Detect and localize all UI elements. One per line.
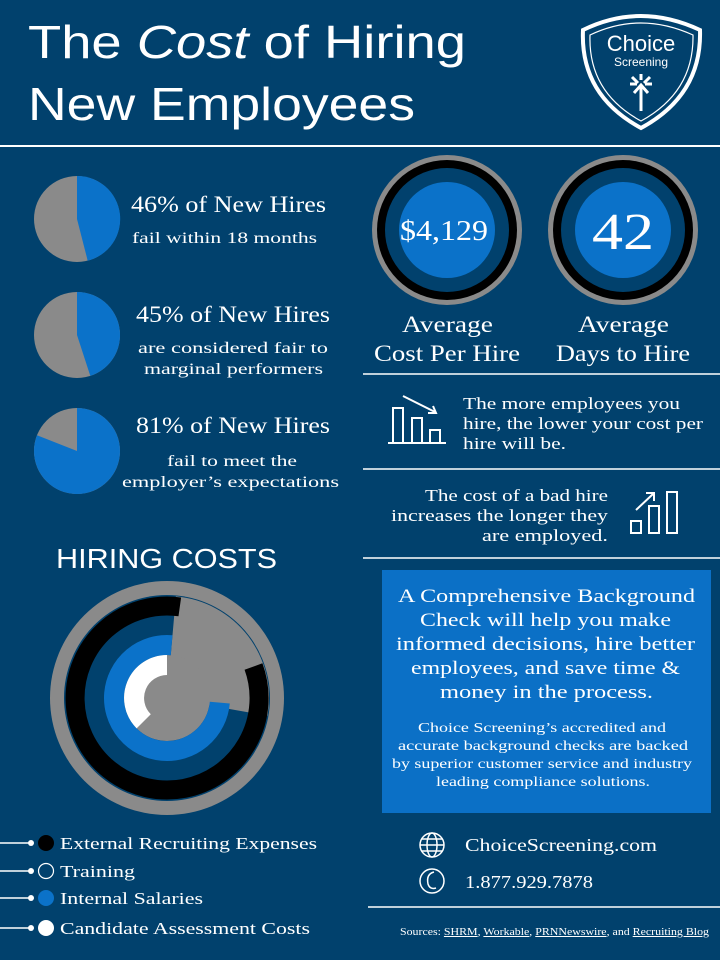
icon: phone (420, 869, 444, 893)
sources: Sources: SHRM , Workable , PRNNewswire , and Recruiting Blog (400, 927, 709, 938)
stat text: 46%: 46% of New Hires (131, 192, 326, 217)
logo: Choice Screening shield: Choice (607, 31, 675, 56)
radial chart: hiring costs (50, 581, 284, 815)
ring stat: days to hire (548, 155, 698, 366)
ring stat: cost per hire: Cost Per Hire (374, 341, 520, 366)
ring stat: days to hire: Average (578, 312, 669, 337)
website: ChoiceScreening.com (465, 835, 657, 855)
legend: Training (60, 862, 136, 881)
callout box: Check will help you make (420, 610, 671, 631)
pie: 46% (34, 176, 120, 262)
text: more employees (463, 394, 704, 453)
phone number: 1.877.929.7878 (465, 872, 593, 892)
callout box: money in the process. (440, 682, 653, 703)
text: more employees: hire will be. (463, 434, 566, 453)
legend: Candidate Assessment Costs (60, 919, 310, 938)
callout box: accurate background checks are backed (398, 738, 688, 753)
icon: decreasing bars (388, 396, 446, 443)
stat text: 45%: 45% of New Hires (136, 302, 330, 327)
stat text: 45%: marginal performers (144, 361, 323, 378)
stat text: 45%: are considered fair to (138, 340, 328, 357)
callout box: informed decisions, hire better (396, 634, 696, 655)
stat text: 45% (136, 302, 330, 378)
legend (0, 834, 317, 938)
legend: External Recruiting Expenses (60, 834, 317, 853)
stat text: 81%: fail to meet the (167, 453, 297, 470)
text: bad hire: are employed. (482, 526, 608, 545)
icon: increasing bars (631, 492, 677, 533)
callout box: by superior customer service and industry (392, 756, 692, 771)
callout box: leading compliance solutions. (436, 774, 650, 789)
ring stat: cost per hire (372, 155, 522, 366)
stat text: 81% (122, 413, 339, 491)
text: bad hire: The cost of a bad hire (425, 486, 608, 505)
pie: 45% (34, 292, 120, 378)
title (28, 16, 466, 130)
ring stat: days to hire: Days to Hire (556, 341, 690, 366)
pie: 81% (34, 408, 120, 494)
text: bad hire (391, 486, 609, 545)
title: New Employees (28, 78, 415, 130)
ring stat: cost per hire: $4,129 (400, 216, 488, 247)
stat text: 81%: 81% of New Hires (136, 413, 330, 438)
callout box: employees, and save time & (411, 658, 680, 679)
callout box: A Comprehensive Background (398, 586, 696, 607)
logo: Choice Screening shield (583, 16, 700, 128)
title: The Cost of Hiring (28, 16, 466, 68)
logo: Choice Screening shield: Screening (614, 55, 668, 69)
icon: globe (420, 833, 444, 857)
text: bad hire: increases the longer they (391, 506, 609, 525)
legend: Internal Salaries (60, 889, 203, 908)
ring stat: days to hire: 42 (592, 204, 654, 261)
stat text: 46% (131, 192, 326, 247)
ring stat: cost per hire: Average (402, 312, 493, 337)
stat text: 46%: fail within 18 months (132, 230, 317, 247)
heading: hiring costs: HIRING COSTS (56, 543, 277, 574)
text: more employees: hire, the lower your cost per (463, 414, 704, 433)
callout box (382, 570, 711, 813)
stat text: 81%: employer’s expectations (122, 474, 339, 491)
text: more employees: The more employees you (463, 394, 680, 413)
callout box: Choice Screening’s accredited and (418, 720, 666, 735)
